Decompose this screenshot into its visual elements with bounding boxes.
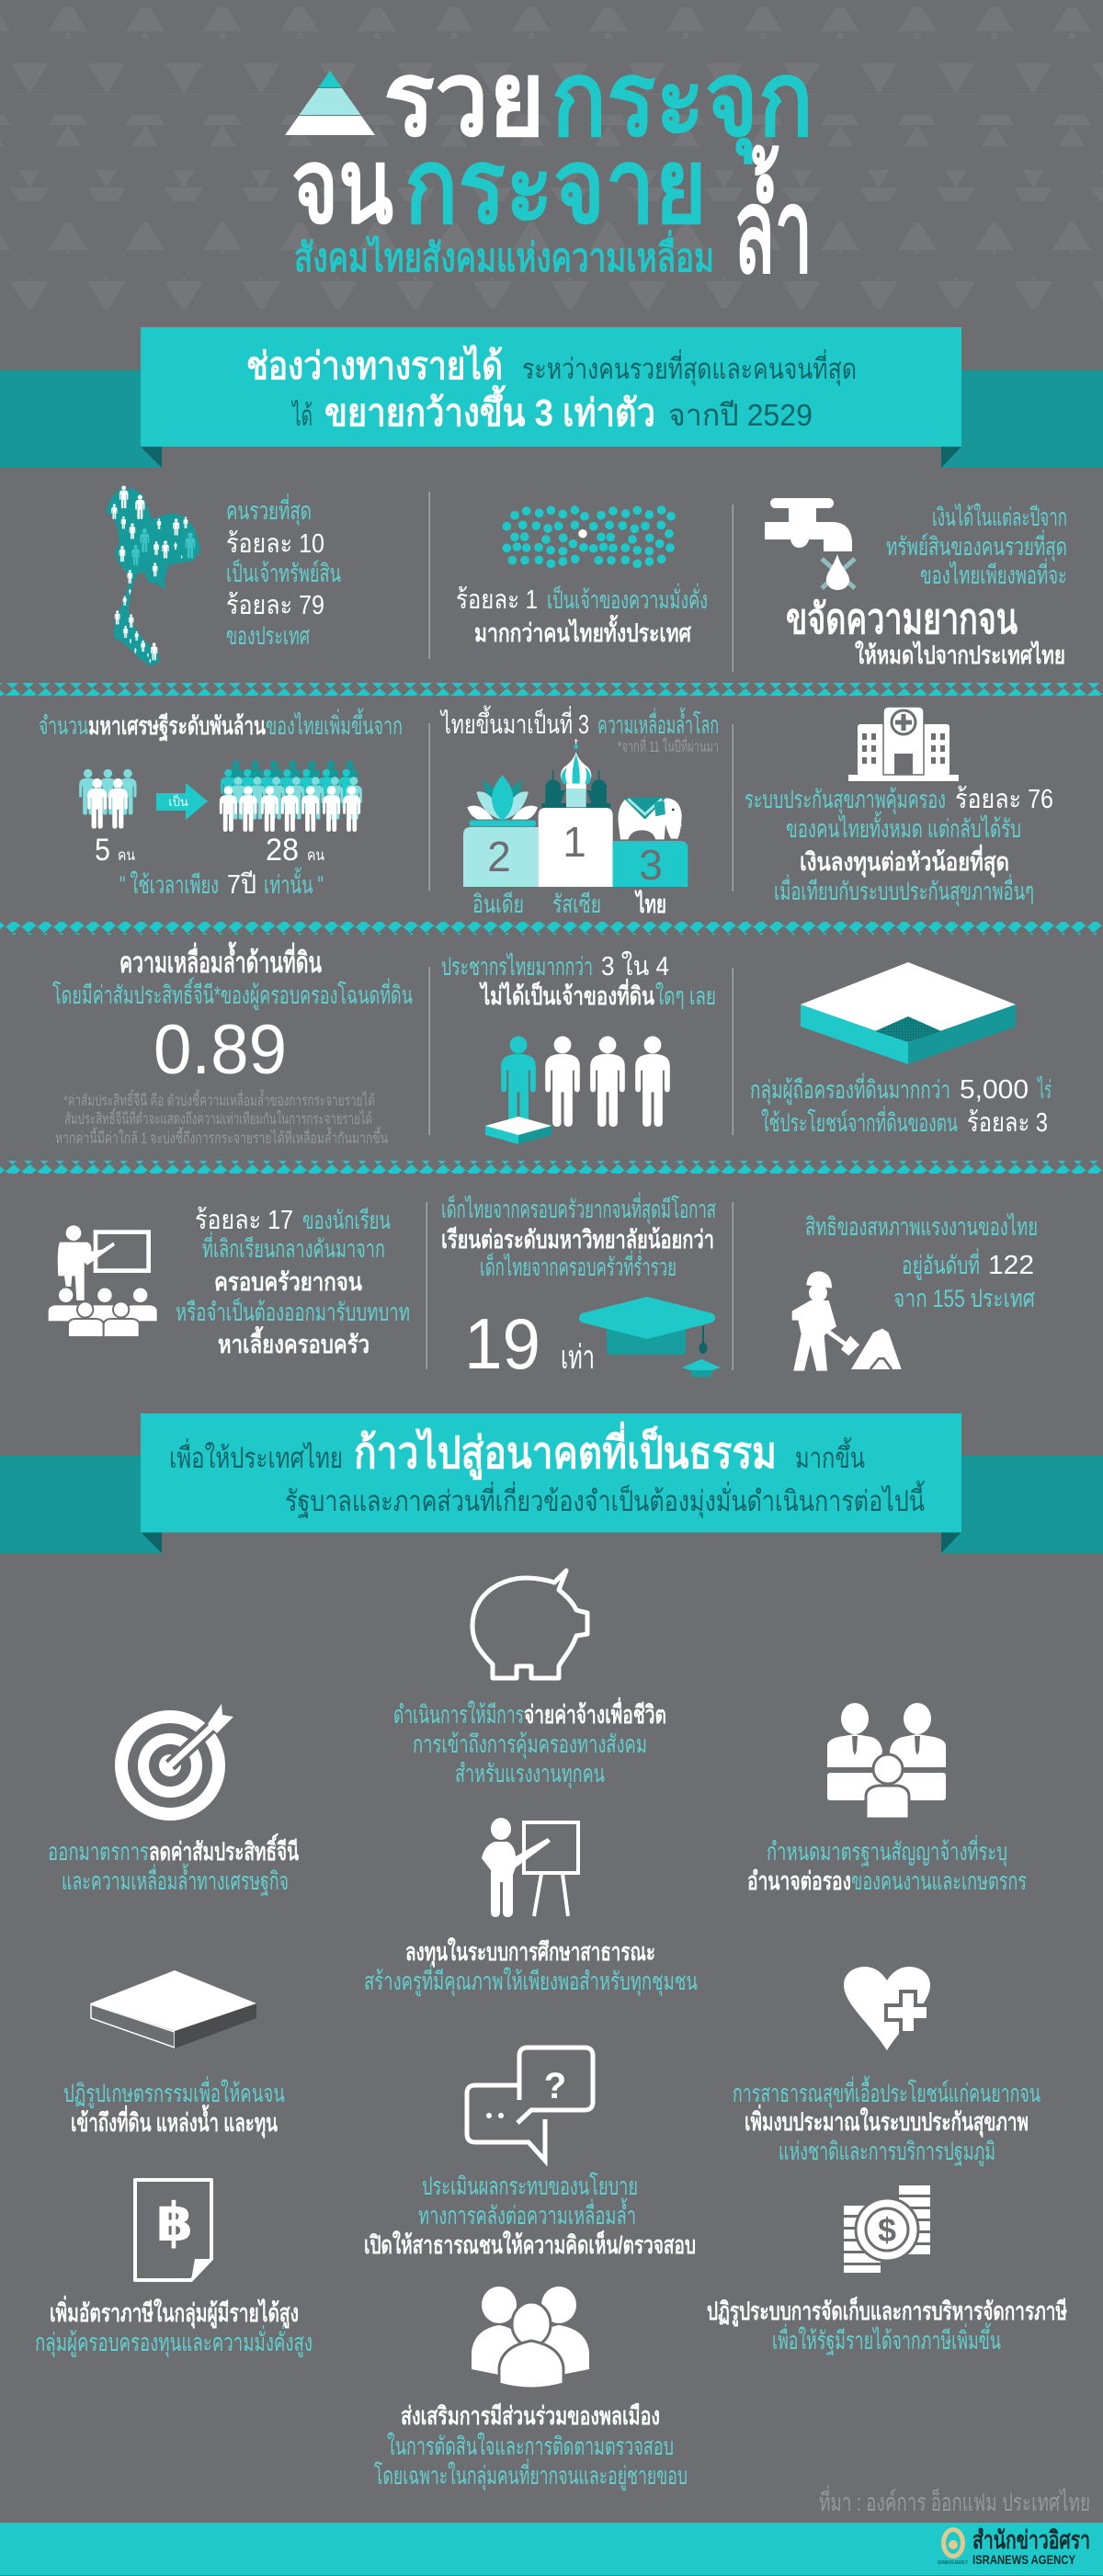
icon: coins: $ bbox=[878, 2211, 896, 2249]
icon: graduation cap bbox=[579, 1297, 721, 1377]
footnote: สัมประสิทธิ์จีนีที่ต่ำจะแสดงถึงความเท่าเทียมกันในการกระจายรายได้ bbox=[64, 1107, 372, 1128]
text: richest ten percent: คนรวยที่สุด bbox=[226, 494, 312, 527]
panel: land gini: ความเหลื่อมล้ำด้านที่ดิน bbox=[119, 941, 322, 979]
footer bbox=[0, 2523, 1103, 2575]
policy: fiscal impact: เปิดให้สาธารณชนให้ความคิดเห็น/ตรวจสอบ bbox=[364, 2229, 696, 2259]
text: counts: คน bbox=[307, 846, 324, 864]
icon: baht document: ฿ bbox=[156, 2191, 193, 2253]
panel: labour rights bbox=[792, 1213, 1038, 1371]
text: health coverage: ร้อยละ 76 bbox=[955, 785, 1053, 814]
policy: reduce gini: ออกมาตรการ bbox=[48, 1838, 149, 1866]
panel: university gap bbox=[441, 1192, 721, 1384]
text: eliminate poverty bbox=[786, 503, 1067, 669]
policy: reduce gini: ลดค่าสัมประสิทธิ์จีนี bbox=[149, 1833, 299, 1866]
policy: tax reform bbox=[707, 2185, 1067, 2355]
icon: presenter bbox=[482, 1818, 578, 1917]
number: nineteen times: 19 bbox=[464, 1303, 540, 1384]
policy: fiscal impact: ประเมินผลกระทบของนโยบาย bbox=[422, 2173, 638, 2200]
panel: richest 10 percent map bbox=[106, 485, 341, 666]
panel: eliminate poverty bbox=[765, 498, 1067, 669]
title line 2: จน bbox=[291, 129, 393, 245]
number: nineteen times bbox=[464, 1303, 595, 1384]
text: health coverage: ระบบประกันสุขภาพคุ้มครอง bbox=[745, 786, 946, 815]
policy: higher tax: กลุ่มผู้ครอบครองทุนและความมั่งคั่งสูง bbox=[35, 2325, 313, 2358]
policy: agrarian reform: เข้าถึงที่ดิน แหล่งน้ำ และทุน bbox=[71, 2104, 278, 2139]
text: school dropouts: ของนักเรียน bbox=[302, 1207, 391, 1234]
icon: lotus bbox=[467, 775, 538, 826]
text: university gap: เด็กไทยจากครอบครัวที่ร่ำรวย bbox=[480, 1250, 677, 1281]
icon: hospital bbox=[848, 707, 959, 781]
banner: income gap: ระหว่างคนรวยที่สุดและคนจนที่สุด bbox=[522, 349, 857, 387]
icon: five people bbox=[79, 769, 136, 829]
panel: school dropouts bbox=[48, 1206, 410, 1358]
text: counts: คน bbox=[118, 846, 135, 864]
policy: fiscal impact: ทางการคลังต่อความเหลื่อมล้ำ bbox=[418, 2197, 636, 2230]
policy: living wage: สำหรับแรงงานทุกคน bbox=[455, 1760, 605, 1789]
icon: construction worker bbox=[792, 1271, 902, 1371]
text: land holders: ร้อยละ 3 bbox=[967, 1108, 1048, 1138]
number: gini: 0.89 bbox=[154, 1011, 287, 1089]
podium numbers: 1 bbox=[563, 818, 586, 866]
text: top one percent: ร้อยละ 1 bbox=[456, 585, 538, 615]
banner: income gap: ช่องว่างทางรายได้ bbox=[246, 344, 503, 387]
banner: income gap: จากปี 2529 bbox=[668, 398, 813, 432]
footnote bbox=[55, 1089, 388, 1147]
policy: reduce gini bbox=[48, 1704, 299, 1896]
banner: fair future: มากขึ้น bbox=[795, 1437, 865, 1474]
text: top one percent: เป็นเจ้าของความมั่งคั่ง bbox=[547, 583, 708, 614]
podium numbers bbox=[487, 818, 663, 889]
policy: citizen participation: โดยเฉพาะในกลุ่มคนที่ยากจนและอยู่ชายขอบ bbox=[374, 2458, 688, 2491]
text: in only seven years: " ใช้เวลาเพียง bbox=[119, 870, 219, 899]
heading: billionaires: ของไทยเพิ่มขึ้นจาก bbox=[266, 708, 403, 740]
policy: living wage bbox=[393, 1571, 666, 1789]
policy: agrarian reform bbox=[63, 1970, 285, 2139]
text: labour rights bbox=[805, 1213, 1038, 1312]
icon: four people bbox=[501, 1036, 670, 1127]
heading: ranking bbox=[440, 705, 719, 755]
title line 1: รวย bbox=[383, 41, 545, 158]
podium labels: รัสเซีย bbox=[552, 891, 601, 918]
text: land holders: ใช้ประโยชน์จากที่ดินของตน bbox=[761, 1106, 958, 1137]
chart: podium bbox=[463, 739, 688, 887]
text: land holders bbox=[750, 1072, 1052, 1138]
footnote: *ค่าสัมประสิทธิ์จีนี คือ ตัวบ่งชี้ความเหลื่อมล้ำของการกระจายรายได้ bbox=[63, 1089, 375, 1109]
heading: ranking: ความเหลื่อมล้ำโลก bbox=[597, 707, 719, 739]
panel: three in four landless bbox=[441, 950, 716, 1144]
logo: Isranews Agency bbox=[938, 2526, 1090, 2567]
title line 1 bbox=[383, 41, 813, 165]
panel: land holders bbox=[750, 962, 1052, 1138]
text: counts: 5 bbox=[95, 833, 110, 868]
heading: ranking: ไทยขึ้นมาเป็นที่ 3 bbox=[440, 705, 589, 740]
policy: reduce gini: และความเหลื่อมล้ำทางเศรษฐกิจ bbox=[62, 1863, 289, 1896]
policy: agrarian reform: ปฏิรูปเกษตรกรรมเพื่อให้คนจน bbox=[63, 2076, 285, 2108]
heading: billionaires bbox=[39, 708, 403, 743]
text: top one percent bbox=[456, 583, 708, 647]
policy: living wage: การเข้าถึงการคุ้มครองทางสังคม bbox=[413, 1731, 647, 1760]
icon: elephant bbox=[618, 798, 682, 839]
icon: land block bbox=[90, 1970, 256, 2048]
icon: meeting bbox=[827, 1703, 946, 1819]
panel: three in four landless: ไม่ได้เป็นเจ้าของที่ดิน bbox=[479, 978, 654, 1010]
banner: fair future: ก้าวไปสู่อนาคตที่เป็นธรรม bbox=[354, 1421, 777, 1481]
icon: small land block bbox=[485, 1117, 552, 1144]
logo: Isranews Agency: ISRANEWS AGENCY bbox=[972, 2552, 1076, 2567]
policy: public education: ลงทุนในระบบการศึกษาสาธารณะ bbox=[405, 1937, 655, 1968]
policy: public education bbox=[364, 1818, 698, 1997]
policy: public health bbox=[733, 1967, 1040, 2166]
text: land holders: 5,000 bbox=[960, 1075, 1029, 1105]
podium numbers: 2 bbox=[487, 833, 511, 880]
icon: coins bbox=[844, 2185, 930, 2273]
title line 2 bbox=[291, 129, 707, 245]
text: health coverage: เงินลงทุนต่อหัวน้อยที่สุด bbox=[800, 844, 1009, 878]
heading: billionaires: จำนวน bbox=[39, 712, 88, 740]
text: richest ten percent: ร้อยละ 79 bbox=[226, 591, 324, 620]
arrow: became bbox=[156, 783, 208, 820]
banner: fair future bbox=[0, 1413, 1103, 1553]
text: labour rights: จาก 155 ประเทศ bbox=[893, 1285, 1035, 1312]
panel: top one percent bbox=[456, 510, 708, 647]
policy: bargaining power bbox=[747, 1703, 1027, 1895]
text: richest ten percent: เป็นเจ้าทรัพย์สิน bbox=[226, 557, 341, 587]
icon: dots with one white dot bbox=[506, 510, 671, 563]
icon: pyramid bbox=[285, 71, 375, 135]
arrow: became: เป็น bbox=[168, 793, 188, 809]
podium labels bbox=[472, 890, 666, 918]
title bbox=[285, 41, 813, 298]
banner: fair future: เพื่อให้ประเทศไทย bbox=[169, 1438, 343, 1474]
text: university gap: เด็กไทยจากครอบครัวยากจนที่สุดมีโอกาส bbox=[441, 1192, 716, 1225]
icon: target with arrow bbox=[121, 1704, 233, 1814]
text: health coverage bbox=[745, 785, 1053, 907]
title word: inequality: ล้ำ bbox=[733, 144, 813, 298]
text: land holders: ไร่ bbox=[1037, 1076, 1052, 1104]
icon: speech bubbles bbox=[467, 2048, 593, 2161]
panel: billionaires bbox=[39, 708, 403, 900]
policy: public health: แห่งชาติและการบริการปฐมภูมิ bbox=[779, 2138, 995, 2166]
podium step 3 bbox=[613, 841, 688, 887]
title line 1: กระจุก bbox=[552, 41, 813, 165]
text: school dropouts: หรือจำเป็นต้องออกมารับบทบาท bbox=[176, 1296, 410, 1326]
banner: income gap bbox=[0, 327, 1103, 468]
policy: living wage: ดำเนินการให้มีการ bbox=[393, 1700, 524, 1729]
text: in only seven years bbox=[119, 867, 324, 900]
text: university gap: เรียนต่อระดับมหาวิทยาลัยน้อยกว่า bbox=[441, 1226, 714, 1254]
panel: world ranking podium bbox=[440, 705, 719, 918]
number: nineteen times: เท่า bbox=[561, 1338, 595, 1376]
text: school dropouts bbox=[176, 1206, 410, 1358]
policy: bargaining power: อำนาจต่อรอง bbox=[747, 1867, 851, 1895]
policy: public education: สร้างครูที่มีคุณภาพให้เพียงพอสำหรับทุกชุมชน bbox=[364, 1964, 698, 1997]
icon: group of people bbox=[472, 2287, 589, 2389]
panel: health coverage bbox=[745, 707, 1053, 907]
text: school dropouts: ครอบครัวยากจน bbox=[214, 1268, 362, 1296]
podium step 2 bbox=[463, 827, 539, 887]
icon: speech bubbles: ? bbox=[544, 2066, 566, 2106]
text: in only seven years: เท่านั้น " bbox=[264, 867, 324, 899]
text: richest ten percent: ร้อยละ 10 bbox=[226, 529, 324, 559]
subtitle: สังคมไทยสังคมแห่งความเหลื่อม bbox=[294, 230, 714, 280]
text: university gap bbox=[441, 1192, 716, 1281]
text: counts bbox=[95, 833, 324, 868]
policy: citizen participation: ส่งเสริมการมีส่วนร่วมของพลเมือง bbox=[401, 2402, 660, 2430]
banner: income gap: ขยายกว้างขึ้น 3 เท่าตัว bbox=[324, 385, 655, 434]
heading: ranking: *จากที่ 11 ในปีที่ผ่านมา bbox=[618, 735, 719, 755]
text: eliminate poverty: ขจัดความยากจน bbox=[786, 595, 1018, 642]
podium numbers: 3 bbox=[639, 841, 663, 889]
icon: piggy bank bbox=[472, 1571, 587, 1678]
text: labour rights: อยู่อันดับที่ bbox=[902, 1248, 980, 1280]
banner: income gap: ได้ bbox=[290, 400, 313, 432]
policy: higher tax: เพิ่มอัตราภาษีในกลุ่มผู้มีรายได้สูง bbox=[50, 2295, 299, 2329]
policy: fiscal impact bbox=[364, 2048, 696, 2259]
text: richest ten percent bbox=[226, 494, 341, 650]
panel: three in four landless: 3 ใน 4 bbox=[601, 950, 669, 982]
policy: living wage: จ่ายค่าจ้างเพื่อชีวิต bbox=[524, 1697, 666, 1729]
icon: baht document bbox=[135, 2180, 211, 2280]
icon: heart with plus bbox=[844, 1967, 930, 2050]
text: land holders: กลุ่มผู้ถือครองที่ดินมากกว่า bbox=[750, 1072, 950, 1106]
banner: fair future: รัฐบาลและภาคส่วนที่เกี่ยวข้องจำเป็นต้องมุ่งมั่นดำเนินการต่อไปนี้ bbox=[285, 1481, 925, 1519]
panel: three in four landless: ประชากรไทยมากกว่า bbox=[441, 953, 593, 981]
text: school dropouts: หาเลี้ยงครอบครัว bbox=[218, 1325, 370, 1358]
text: in only seven years: 7ปี bbox=[227, 870, 256, 900]
podium labels: อินเดีย bbox=[472, 891, 524, 918]
footnote: หากค่านี้มีค่าใกล้ 1 จะบ่งชี้ถึงการกระจายรายได้ที่เหลื่อมล้ำกันมากขึ้น bbox=[55, 1127, 388, 1147]
text: school dropouts: ที่เลิกเรียนกลางคันมาจาก bbox=[202, 1231, 385, 1263]
panel: three in four landless: ใดๆ เลย bbox=[655, 982, 716, 1010]
policy: higher tax bbox=[35, 2180, 313, 2358]
icon: Thailand map with people bbox=[106, 485, 200, 666]
text: counts: 28 bbox=[266, 833, 299, 868]
logo: Isranews Agency: ISRANEWS AGENCY bbox=[938, 2560, 968, 2566]
podium step 1 bbox=[539, 808, 613, 887]
icon: big land block bbox=[801, 962, 1016, 1064]
policy: citizen participation: ในการตัดสินใจและการติดตามตรวจสอบ bbox=[387, 2432, 674, 2460]
podium labels: ไทย bbox=[634, 890, 666, 918]
icon: water tap and drop bbox=[765, 498, 855, 590]
text: labour rights: 122 bbox=[988, 1251, 1034, 1280]
text: top one percent: มากกว่าคนไทยทั้งประเทศ bbox=[474, 614, 692, 647]
panel: land gini: โดยมีค่าสัมประสิทธิ์จีนี*ของผู้ครอบครองโฉนดที่ดิน bbox=[52, 977, 413, 1010]
icon: twenty-eight people bbox=[220, 761, 362, 832]
icon: onion dome bbox=[541, 739, 610, 808]
icon: teacher and students bbox=[48, 1225, 158, 1337]
heading: billionaires: มหาเศรษฐีระดับพันล้าน bbox=[88, 712, 266, 743]
title line 2: กระจาย bbox=[404, 129, 707, 245]
text: school dropouts: ร้อยละ 17 bbox=[195, 1206, 293, 1235]
policy: citizen participation bbox=[374, 2287, 688, 2491]
text: richest ten percent: ของประเทศ bbox=[226, 622, 310, 650]
panel: land gini bbox=[52, 941, 413, 1147]
